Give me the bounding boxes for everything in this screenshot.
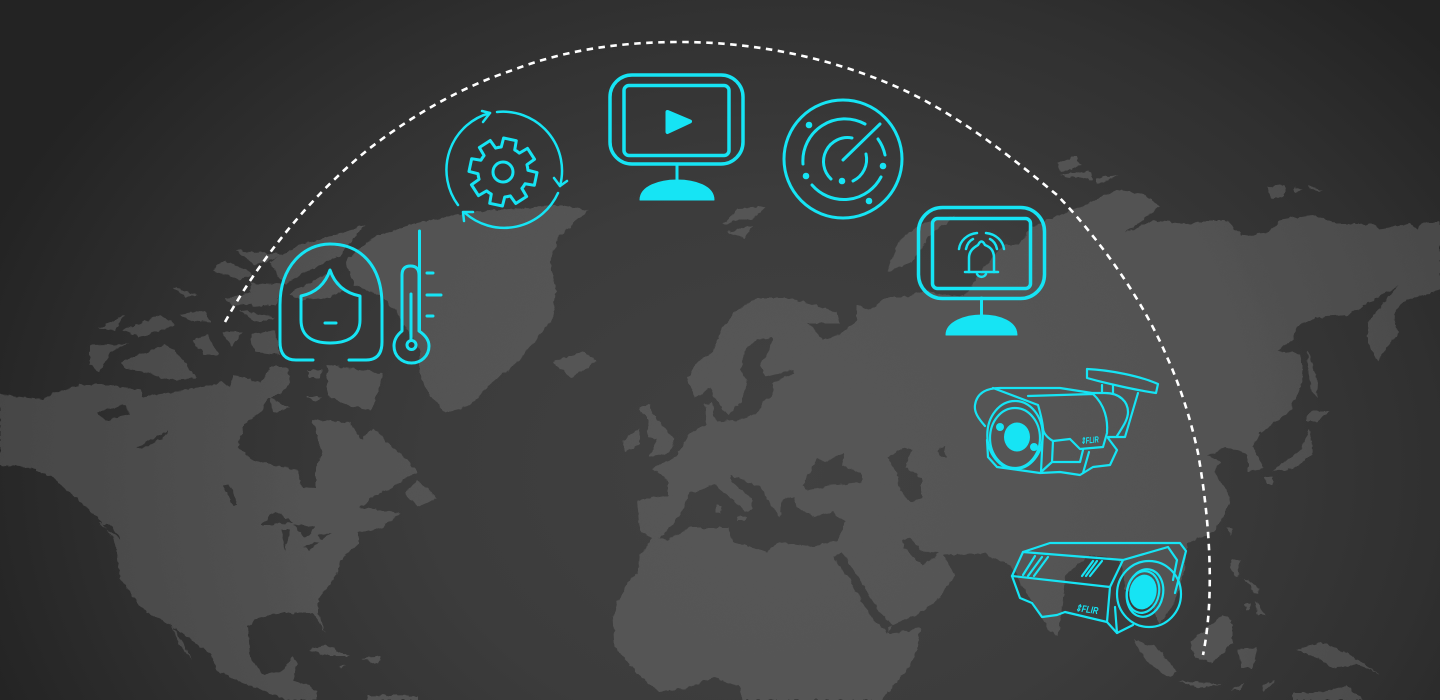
indonesia and new guinea — [1133, 615, 1380, 692]
canadian arctic islands — [90, 250, 383, 413]
ellesmere island — [250, 225, 365, 307]
caribbean islands — [308, 645, 418, 700]
taiwan and philippines — [1228, 527, 1265, 615]
icon: flir box camera — [1012, 543, 1186, 633]
siberian arctic islands — [1057, 156, 1323, 199]
newfoundland — [405, 480, 437, 507]
mediterranean islands — [716, 505, 748, 521]
north america — [0, 367, 417, 700]
icon: flir bullet camera — [975, 369, 1158, 475]
icon: gear with cycle arrows — [446, 111, 567, 228]
iceland — [552, 352, 597, 377]
eurasia and africa — [613, 190, 1440, 700]
australia — [1293, 686, 1363, 700]
icon: alarm monitor — [918, 208, 1044, 335]
icon: radar — [784, 100, 902, 218]
sakhalin — [1307, 351, 1318, 397]
madagascar — [843, 692, 855, 700]
icon: flir box camera: ⇕FLIR — [1075, 603, 1099, 617]
dashed arc — [225, 42, 1210, 655]
icon: flir bullet camera: ⇕FLIR — [1080, 434, 1099, 446]
world map — [0, 156, 1440, 700]
svalbard — [722, 207, 765, 238]
novaya zemlya — [887, 215, 957, 272]
icon: thermometer — [394, 231, 441, 363]
japan — [1265, 411, 1330, 484]
great britain and ireland — [623, 404, 675, 457]
icon: face — [280, 244, 382, 360]
icon: video monitor — [610, 75, 743, 200]
greenland — [345, 205, 588, 413]
